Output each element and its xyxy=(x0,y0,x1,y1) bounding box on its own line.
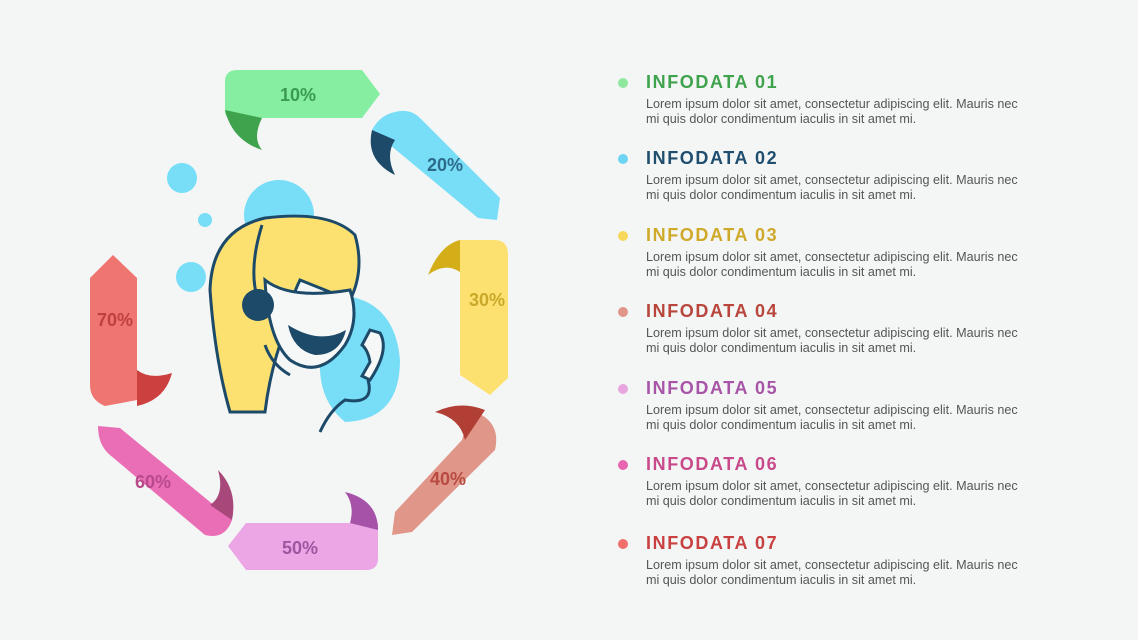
segment 70%: 70% xyxy=(97,310,133,330)
item 07 xyxy=(618,533,1018,587)
icon: call center character xyxy=(167,163,400,432)
text: Lorem ipsum dolor sit amet, consectetur adipiscing elit. Mauris nec mi quis dolor condimentum iaculis in sit amet mi. xyxy=(646,479,1018,508)
segment 50% xyxy=(228,492,378,570)
text: Lorem ipsum dolor sit amet, consectetur adipiscing elit. Mauris nec mi quis dolor condimentum iaculis in sit amet mi. xyxy=(646,326,1018,355)
segment 10% xyxy=(225,70,380,150)
segment 60% xyxy=(98,426,233,536)
text: INFODATA 01 xyxy=(646,72,778,92)
item 06 xyxy=(618,454,1018,508)
item 04 xyxy=(618,301,1018,355)
segment 20% xyxy=(371,111,500,220)
segment 20%: 20% xyxy=(427,155,463,175)
chart: ribbon cycle with character xyxy=(90,70,508,570)
segment 10%: 10% xyxy=(280,85,316,105)
text: Lorem ipsum dolor sit amet, consectetur adipiscing elit. Mauris nec mi quis dolor condimentum iaculis in sit amet mi. xyxy=(646,250,1018,279)
segment 60%: 60% xyxy=(135,472,171,492)
item 01 xyxy=(618,72,1018,126)
text: INFODATA 03 xyxy=(646,225,778,245)
item 05 xyxy=(618,378,1018,432)
text: Lorem ipsum dolor sit amet, consectetur adipiscing elit. Mauris nec mi quis dolor condimentum iaculis in sit amet mi. xyxy=(646,558,1018,587)
item 03 xyxy=(618,225,1018,279)
text: Lorem ipsum dolor sit amet, consectetur adipiscing elit. Mauris nec mi quis dolor condimentum iaculis in sit amet mi. xyxy=(646,97,1018,126)
segment 70% xyxy=(90,255,172,406)
text: INFODATA 06 xyxy=(646,454,778,474)
segment 50%: 50% xyxy=(282,538,318,558)
text: Lorem ipsum dolor sit amet, consectetur adipiscing elit. Mauris nec mi quis dolor condimentum iaculis in sit amet mi. xyxy=(646,403,1018,432)
segment 30% xyxy=(428,240,508,395)
segment 30%: 30% xyxy=(469,290,505,310)
text: Lorem ipsum dolor sit amet, consectetur adipiscing elit. Mauris nec mi quis dolor condimentum iaculis in sit amet mi. xyxy=(646,173,1018,202)
text: INFODATA 07 xyxy=(646,533,778,553)
item 02 xyxy=(618,148,1018,202)
text: INFODATA 05 xyxy=(646,378,778,398)
text: INFODATA 04 xyxy=(646,301,778,321)
segment 40% xyxy=(392,405,496,535)
text: INFODATA 02 xyxy=(646,148,778,168)
segment 40%: 40% xyxy=(430,469,466,489)
